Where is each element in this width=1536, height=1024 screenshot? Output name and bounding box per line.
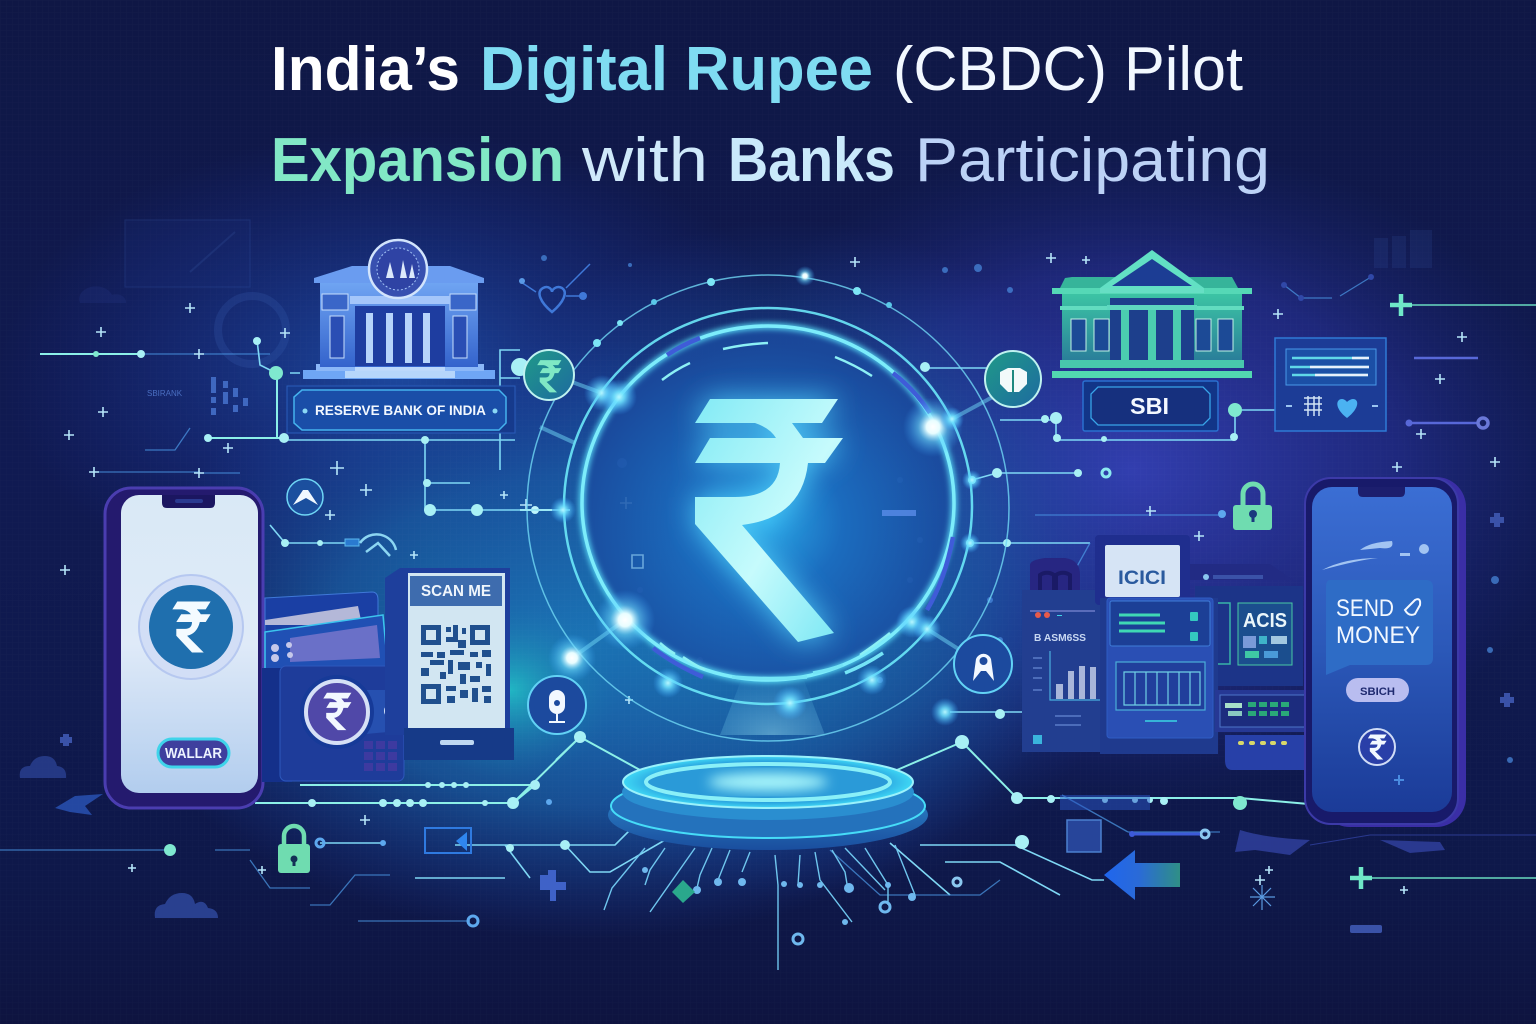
wallet pill [158, 739, 229, 767]
title: Expansion [271, 126, 564, 195]
scan me header: SCAN ME [421, 583, 491, 600]
RBI building [303, 240, 495, 379]
SBI building [1052, 250, 1252, 378]
icon: video frame outline [425, 828, 471, 853]
send money bubble [1326, 580, 1433, 675]
RBI label: RESERVE BANK OF INDIA [315, 402, 486, 418]
left circuit network [0, 337, 665, 926]
QR code [421, 625, 491, 704]
title: Digital Rupee [480, 35, 873, 104]
left arrow blob under phone [55, 794, 103, 815]
ring connection nodes [520, 266, 1000, 726]
SBI label: SBI [1130, 393, 1169, 419]
dashboard panel: B ASM6SS [1034, 633, 1086, 644]
ICICI card: ICICI [1118, 568, 1166, 589]
right circuit network [830, 274, 1536, 895]
icon: heart link [519, 264, 590, 312]
send money pill: SBICH [1360, 686, 1395, 698]
send money bubble: MONEY [1336, 622, 1420, 649]
right back panel with ACIS [1190, 564, 1303, 686]
icon: circle badge bell [954, 635, 1012, 693]
dashboard panel [1022, 590, 1112, 752]
icon: arc link left [345, 534, 396, 556]
decorative silhouette lower right [1235, 830, 1536, 855]
fan of circuit lines under platform [604, 845, 916, 970]
send money pill [1346, 678, 1409, 702]
scan me header [410, 576, 502, 606]
wallet [262, 592, 410, 782]
send money bubble: SEND [1336, 595, 1394, 622]
title: India’s [271, 35, 460, 104]
phone rupee coin [1359, 729, 1395, 765]
center panel [1100, 598, 1218, 754]
snowflake icon [1250, 885, 1275, 910]
icon: green rupee coin [524, 350, 574, 400]
title: Banks [728, 126, 895, 195]
title: (CBDC) Pilot [893, 35, 1243, 104]
decorative cloud lower left [155, 893, 218, 918]
bottom left lock icon [278, 826, 310, 873]
data card right of SBI [1275, 338, 1386, 431]
outline square lower right [1067, 820, 1101, 852]
left phone [105, 488, 263, 808]
right back panel with ACIS: ACIS [1243, 610, 1287, 632]
small chip text mark [1350, 925, 1382, 933]
scattered plus signs and dots [60, 253, 1514, 894]
icon: green shield coin [985, 351, 1041, 407]
ICICI card [1095, 535, 1190, 605]
wallet pill: WALLAR [165, 745, 222, 762]
rupee symbol [695, 399, 843, 642]
right phone [1305, 477, 1466, 827]
title: Participating [915, 126, 1270, 195]
lower right rack [1215, 690, 1305, 770]
title [271, 35, 1270, 195]
faded cloud left [20, 756, 66, 778]
icon: circle badge left upper [287, 479, 323, 515]
faint background chart, top left [79, 220, 286, 364]
title: with [581, 126, 708, 195]
plus icon lower center left [540, 870, 566, 901]
faint label and data bars, left: SBIRANK [147, 389, 183, 398]
bank dashboards [1022, 535, 1305, 770]
top lock icon [1233, 484, 1272, 530]
QR stand [385, 568, 514, 760]
arrow pointing left [1104, 850, 1180, 900]
central hologram rings [520, 266, 1009, 741]
faint bars, top right [1374, 230, 1432, 268]
faint label and data bars, left [147, 377, 248, 415]
icon: circle badge microphone [528, 676, 586, 734]
RBI label [287, 386, 515, 433]
wallet coin on phone [139, 575, 243, 679]
SBI label [1083, 381, 1218, 431]
glowing platform [608, 756, 928, 850]
RBI seal [369, 240, 427, 298]
